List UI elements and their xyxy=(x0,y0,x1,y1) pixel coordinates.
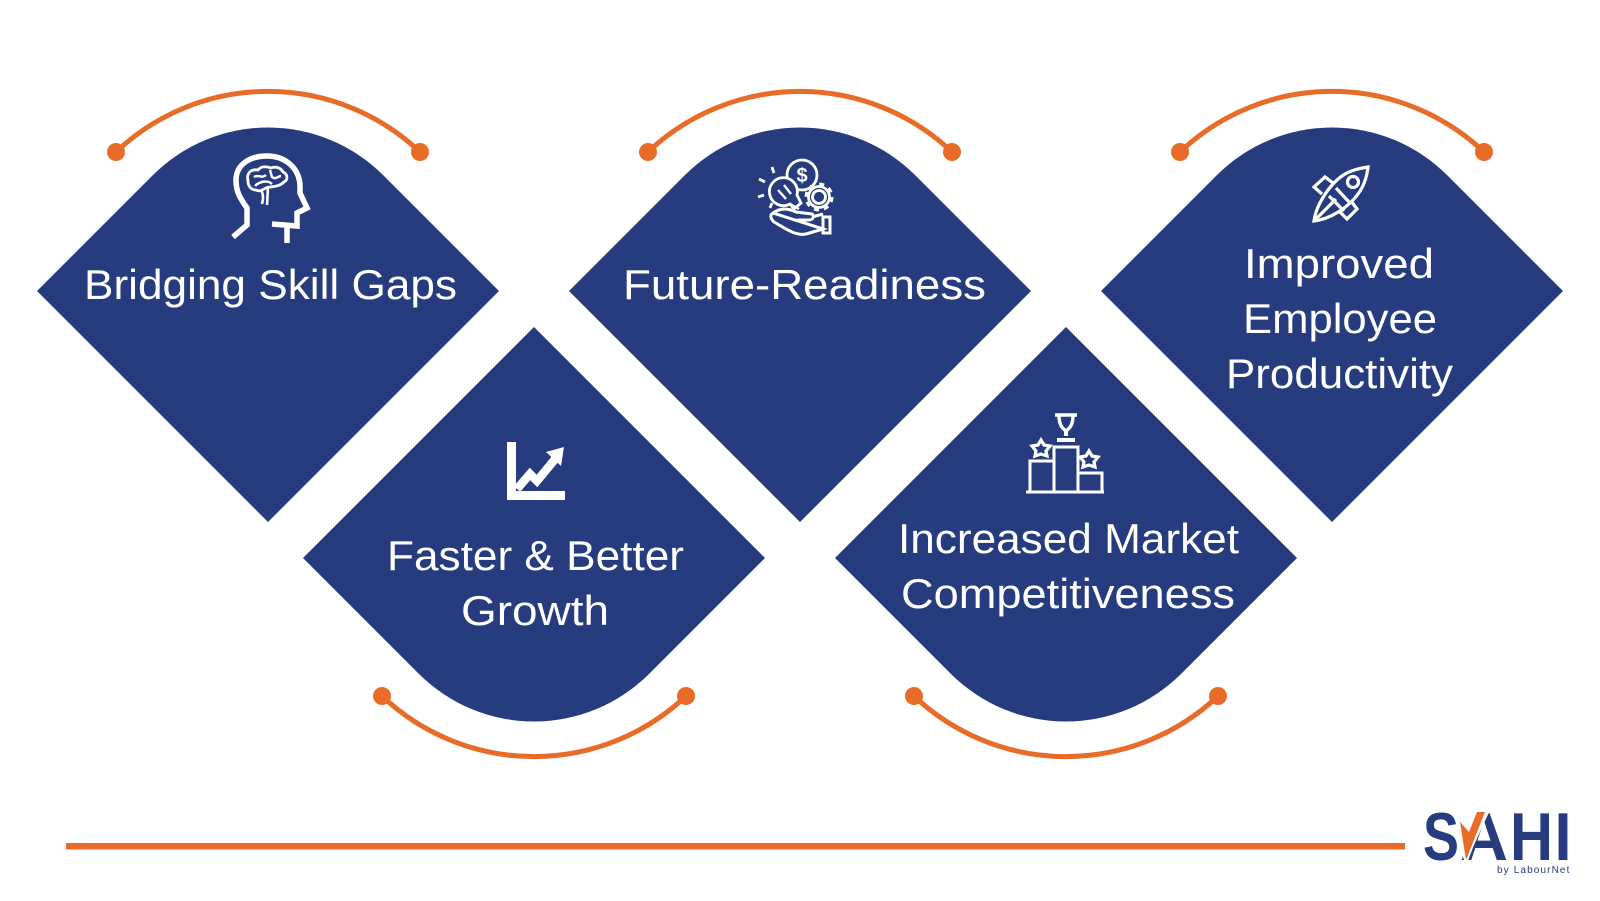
logo: SAHI by LabourNet: A xyxy=(1460,799,1508,875)
logo: SAHI by LabourNet: S xyxy=(1423,799,1459,875)
panel: faster and better growth xyxy=(303,327,765,757)
heading line 2: Employee xyxy=(1243,295,1437,342)
heading: Increased Market xyxy=(898,515,1239,562)
orange arc 3 xyxy=(639,91,961,161)
icon: bulb, coin, gear and hand xyxy=(758,160,832,234)
orange arc 5 xyxy=(1171,91,1493,161)
logo: SAHI by LabourNet: H xyxy=(1510,799,1553,875)
icon: trophy podium xyxy=(1026,415,1104,492)
heading: Faster & Better xyxy=(387,532,684,579)
heading line 2: Competitiveness xyxy=(901,570,1235,617)
panel: improved employee productivity xyxy=(1101,91,1563,522)
orange arc 1 xyxy=(107,91,429,161)
diamond shape 3 xyxy=(569,128,1031,522)
heading line 3: Productivity xyxy=(1226,350,1453,397)
heading: Future-Readiness xyxy=(623,261,986,308)
diamond shape 2 xyxy=(303,327,765,721)
logo: SAHI by LabourNet: by LabourNet xyxy=(1497,865,1570,876)
panel: increased market competitiveness xyxy=(835,327,1297,757)
heading line 2: Growth xyxy=(461,587,609,634)
logo: SAHI by LabourNet: I xyxy=(1554,799,1572,875)
heading: Improved xyxy=(1244,240,1434,287)
diamond shape 5 xyxy=(1101,128,1563,522)
icon: rocket xyxy=(1314,167,1368,221)
footer rule xyxy=(66,843,1405,850)
diamond shape 4 xyxy=(835,327,1297,721)
panel: future readiness xyxy=(569,91,1031,522)
diamond shape 1 xyxy=(37,128,499,522)
logo: SAHI by LabourNet xyxy=(1423,799,1572,876)
icon: brain in head xyxy=(233,156,307,243)
orange arc 2 xyxy=(373,687,695,757)
orange arc 4 xyxy=(905,687,1227,757)
heading: Bridging Skill Gaps xyxy=(84,261,457,308)
panel: bridging skill gaps xyxy=(37,91,499,522)
icon: growth chart xyxy=(507,442,565,500)
icon: bulb, coin, gear and hand: $ xyxy=(796,165,808,187)
